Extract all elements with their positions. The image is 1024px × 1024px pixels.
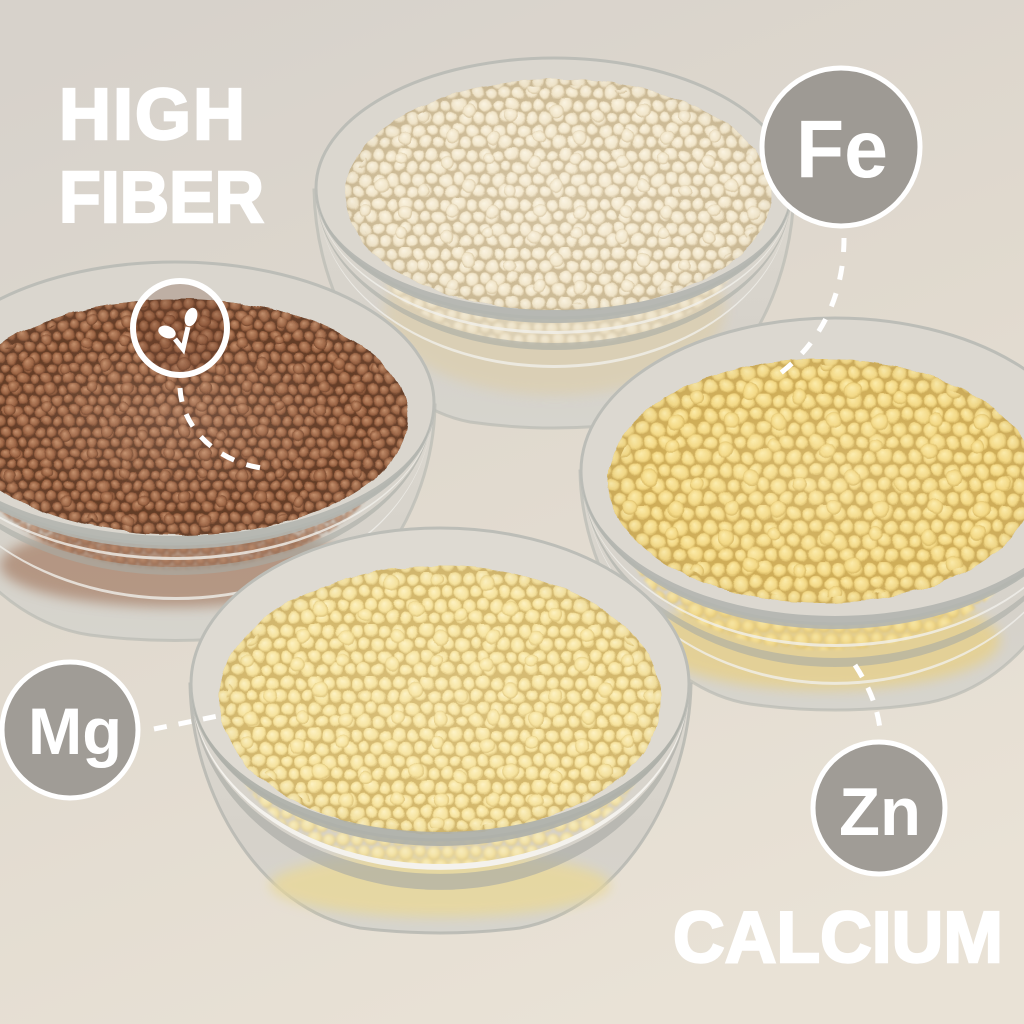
badge: zinc Zn: Zn bbox=[839, 774, 921, 850]
badge: iron Fe: Fe bbox=[796, 104, 888, 195]
badge: zinc Zn bbox=[813, 742, 945, 874]
pale yellow grain pile bbox=[219, 566, 661, 834]
connector: zinc to right bowl bbox=[855, 665, 880, 729]
cream grain pile bbox=[345, 79, 771, 311]
yellow grain pile bbox=[608, 359, 1024, 603]
panel: front bowl of pale yellow grains bbox=[190, 528, 691, 933]
brown grain pile bbox=[0, 299, 408, 535]
heading: high fiber: FIBER bbox=[59, 158, 264, 238]
heading: calcium: CALCIUM bbox=[673, 898, 1003, 978]
badge: iron Fe bbox=[762, 68, 920, 226]
badge: magnesium Mg bbox=[2, 662, 138, 798]
icon: sprout badge bbox=[133, 281, 227, 375]
heading: high fiber: HIGH bbox=[59, 75, 245, 155]
connector: sprout to brown bowl bbox=[180, 388, 270, 469]
panel: top bowl of cream grains bbox=[314, 58, 794, 428]
heading: high fiber bbox=[59, 75, 264, 238]
connector: iron to yellow bowl bbox=[778, 238, 844, 375]
badge: magnesium Mg: Mg bbox=[28, 694, 122, 768]
panel: left bowl of brown grains bbox=[0, 262, 435, 640]
panel: right bowl of yellow grains bbox=[580, 318, 1024, 710]
connector: magnesium to front bowl bbox=[154, 716, 218, 729]
